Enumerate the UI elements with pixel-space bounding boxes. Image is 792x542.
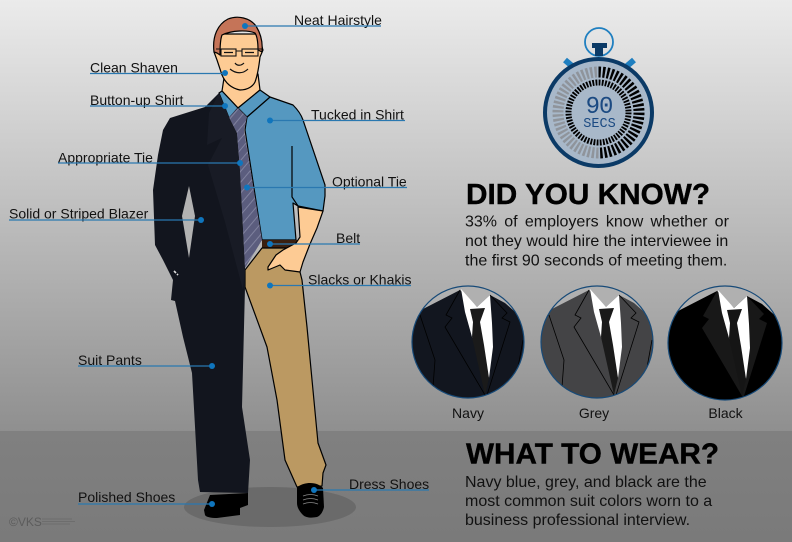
khaki slacks	[245, 248, 326, 487]
label: Belt: Belt	[336, 230, 360, 246]
blazer and suit pants	[153, 93, 250, 493]
stopwatch side buttons	[565, 60, 634, 66]
label: Tucked in Shirt: Tucked in Shirt	[311, 106, 404, 122]
stopwatch crown	[592, 43, 607, 56]
text block: did you know	[465, 214, 730, 270]
label: Appropriate Tie	[58, 150, 243, 166]
text block: did you know: the first 90 seconds of meeting them.	[465, 252, 727, 270]
label: Appropriate Tie: Appropriate Tie	[58, 150, 153, 166]
label: Dress Shoes: Dress Shoes	[349, 476, 429, 492]
label: Suit Pants	[78, 352, 215, 369]
neck	[222, 74, 260, 108]
shoe laces	[303, 494, 318, 504]
label: Clean Shaven	[90, 60, 228, 76]
stopwatch text 90: 90	[586, 94, 612, 121]
blazer lapel panel	[207, 93, 245, 290]
label: Solid or Striped Blazer	[9, 206, 204, 223]
label: Tucked in Shirt	[267, 106, 405, 124]
shirt	[245, 97, 325, 240]
arm skin and hand	[268, 207, 323, 272]
inner ticks	[568, 82, 628, 142]
text block: what to wear	[465, 474, 712, 529]
stopwatch ring	[585, 28, 613, 56]
arm gap	[182, 186, 195, 258]
label: Button-up Shirt	[90, 92, 228, 109]
right shoe	[297, 483, 324, 518]
text block: what to wear: most common suit colors worn to a	[465, 493, 712, 510]
label: Belt	[267, 230, 360, 247]
text block: did you know: not they would hire the interviewee in	[465, 233, 728, 250]
label: Dress Shoes	[311, 476, 429, 493]
label: Polished Shoes: Polished Shoes	[78, 489, 175, 505]
panel: black suit	[662, 286, 787, 421]
logo: copyright VKS	[9, 515, 75, 529]
figure: man half suit half casual	[153, 17, 326, 518]
belt	[262, 240, 297, 248]
background wall	[0, 0, 792, 432]
lapels	[702, 291, 767, 396]
collar	[219, 90, 270, 118]
label: Navy: Navy	[452, 405, 484, 421]
label: Grey: Grey	[579, 405, 609, 421]
left shoe	[204, 493, 248, 518]
outer ticks, remaining half	[558, 72, 598, 153]
label: Slacks or Khakis: Slacks or Khakis	[308, 272, 411, 288]
text block: what to wear: business professional interview.	[465, 512, 690, 529]
eyes and smile	[224, 52, 254, 73]
text block: what to wear: Navy blue, grey, and black are the	[465, 474, 707, 491]
background floor	[0, 431, 792, 542]
text block: did you know: 33% of employers know whether or	[465, 214, 730, 230]
glasses	[216, 49, 262, 56]
label: Button-up Shirt: Button-up Shirt	[90, 92, 183, 108]
tie	[229, 108, 262, 268]
label: Slacks or Khakis	[267, 272, 411, 288]
panel: navy suit	[405, 286, 530, 421]
sleeve fold	[292, 146, 298, 206]
label: Neat Hairstyle	[242, 12, 382, 29]
label: Black: Black	[708, 405, 744, 421]
logo: copyright VKS: ©VKS	[9, 515, 42, 529]
label: Clean Shaven: Clean Shaven	[90, 60, 178, 76]
label: Optional Tie	[244, 174, 407, 190]
hair	[214, 17, 262, 55]
stopwatch text SECS: SECS	[583, 117, 616, 132]
blazer buttons	[174, 271, 178, 275]
label: Optional Tie: Optional Tie	[332, 174, 407, 190]
floor shadow	[184, 487, 356, 527]
stopwatch face	[545, 59, 652, 166]
outer ticks, elapsed half	[598, 72, 639, 153]
label: Neat Hairstyle: Neat Hairstyle	[294, 12, 382, 28]
label: Solid or Striped Blazer: Solid or Striped Blazer	[9, 206, 149, 222]
heading: did you know: DID YOU KNOW?	[466, 179, 710, 211]
face	[214, 34, 263, 90]
heading: what to wear: WHAT TO WEAR?	[466, 438, 719, 470]
label: Polished Shoes	[78, 489, 215, 507]
panel: grey suit	[534, 286, 659, 421]
icon: stopwatch 90 seconds	[545, 28, 652, 166]
label: Suit Pants: Suit Pants	[78, 352, 142, 368]
